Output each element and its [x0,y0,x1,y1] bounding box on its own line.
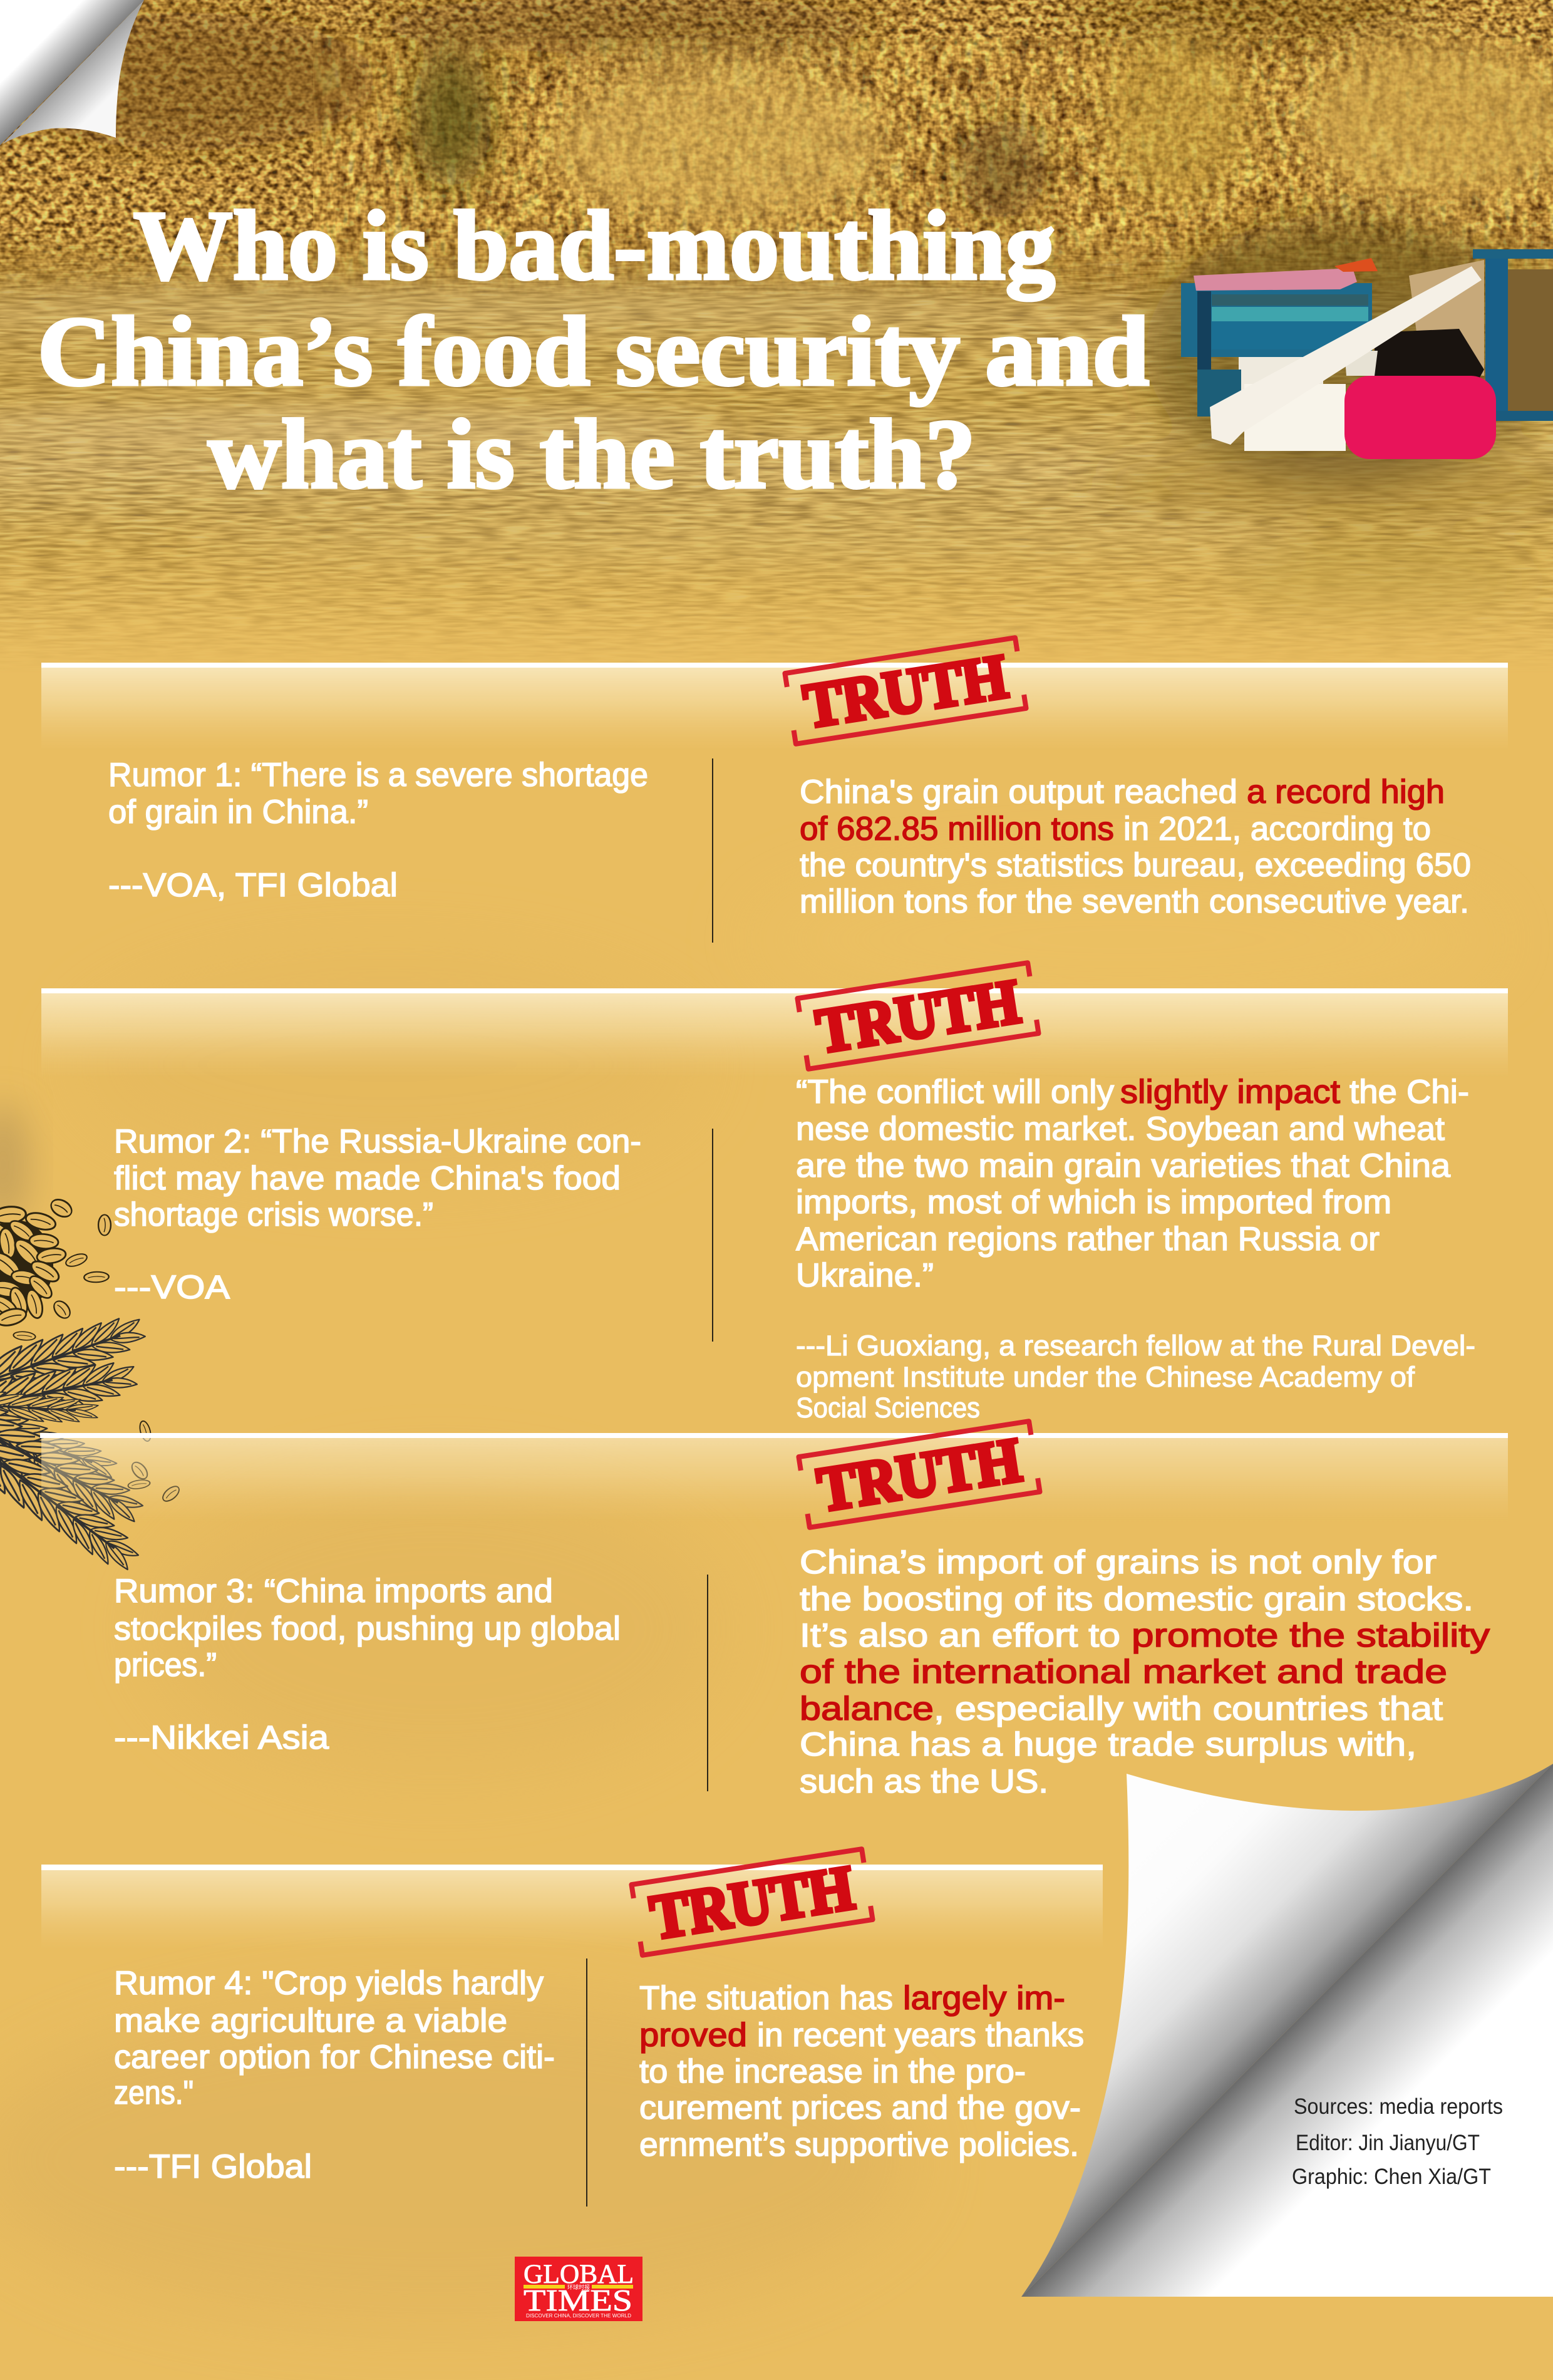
panel header band [41,988,1508,1079]
divider [712,758,713,943]
rumor text [114,1573,621,1756]
rumor text: stockpiles food, pushing up global [114,1610,621,1647]
truth text [800,1544,1490,1800]
rumor text: make agriculture a viable [114,2002,507,2039]
truth text: promote the stability [1132,1617,1490,1654]
photo: harvester [1181,249,1553,459]
rumor text: Rumor 1: “There is a severe shortage [108,757,648,794]
divider [586,1958,587,2207]
rumor text: shortage crisis worse.” [114,1196,433,1233]
stamp: truth: TRUTH [646,1853,859,1952]
truth text: China has a huge trade surplus with, [800,1726,1416,1763]
rumor text: Rumor 2: “The Russia-Ukraine con- [114,1123,641,1160]
panel: rumor 4 [41,1849,1103,2207]
truth text: the Chi- [1349,1074,1469,1110]
title: what is the truth? [208,400,976,509]
logo: Global Times: DISCOVER CHINA, DISCOVER THE WORLD [526,2313,631,2319]
truth text: a record high [1247,773,1445,810]
rumor text: ---TFI Global [114,2148,312,2185]
truth text: nese domestic market. Soybean and wheat [796,1110,1445,1147]
truth text: It’s also an effort to [800,1617,1120,1654]
title: China’s food security and [38,297,1149,406]
truth text: the boosting of its domestic grain stocks. [800,1581,1473,1618]
page curl: bottom right with credits [1021,1764,1553,2297]
logo: Global Times: GLOBAL [524,2260,634,2289]
truth text: “The conflict will only [796,1074,1115,1110]
divider [712,1129,713,1342]
truth text: largely im- [903,1980,1065,2017]
truth text: curement prices and the gov- [639,2089,1081,2126]
truth text: balance [800,1690,934,1727]
credits: Sources: media reports [1294,2094,1503,2119]
panel header band [40,1433,1508,1523]
truth text: million tons for the seventh consecutive year. [800,883,1469,920]
rumor text: ---VOA, TFI Global [108,867,398,904]
panel: rumor 1 [41,638,1508,943]
truth text: to the increase in the pro- [639,2053,1026,2090]
logo: Global Times [515,2257,642,2321]
stamp: truth: TRUTH [813,1425,1026,1524]
photo: wheat field background [0,0,1553,689]
rumor text [114,1965,555,2185]
truth text: China's grain output reached [800,773,1237,810]
credits: Editor: Jin Jianyu/GT [1296,2131,1480,2155]
truth text: such as the US. [800,1763,1048,1800]
truth text: of 682.85 million tons [800,810,1114,847]
truth text [796,1074,1475,1424]
truth text: Social Sciences [796,1392,980,1424]
rumor text: career option for Chinese citi- [114,2039,555,2076]
truth text [800,773,1471,920]
truth text: , especially with countries that [934,1690,1443,1727]
credits [1292,2094,1503,2189]
truth text: The situation has [639,1980,893,2017]
title [38,191,1149,509]
rumor text [108,757,648,904]
truth text: imports, most of which is imported from [796,1184,1391,1221]
rumor text: ---VOA [114,1269,230,1306]
page curl: top left [0,0,144,145]
truth text: proved [639,2017,747,2054]
logo: Global Times: TIMES [524,2283,632,2317]
rumor text: prices.” [114,1647,217,1684]
divider [707,1575,708,1791]
stamp: truth: TRUTH [812,966,1024,1066]
stamp: truth: TRUTH [800,641,1012,741]
truth text: ---Li Guoxiang, a research fellow at the Rural Devel- [796,1330,1475,1362]
rumor text [114,1123,641,1306]
truth text: slightly impact [1120,1074,1340,1110]
truth text: the country's statistics bureau, exceeding 650 [800,847,1471,884]
truth text: ernment’s supportive policies. [639,2126,1079,2163]
rumor text: zens." [114,2074,193,2111]
truth text: in 2021, according to [1123,810,1431,847]
credits: Graphic: Chen Xia/GT [1292,2165,1491,2189]
rumor text: flict may have made China's food [114,1160,621,1197]
truth text: China’s import of grains is not only for [800,1544,1437,1581]
panel header band [41,1865,1103,1949]
truth text: are the two main grain varieties that China [796,1147,1451,1184]
logo: Global Times: 环球时报 [567,2284,590,2290]
icon: wheat ears and grains illustration [0,1196,182,1580]
rumor text: Rumor 3: “China imports and [114,1573,553,1610]
truth text: American regions rather than Russia or [796,1221,1380,1258]
truth text: Ukraine.” [796,1257,934,1294]
truth text: in recent years thanks [757,2017,1084,2054]
truth text: opment Institute under the Chinese Academy of [796,1361,1415,1393]
panel header band [41,663,1508,752]
panel: rumor 2 [41,963,1508,1424]
title: Who is bad-mouthing [133,191,1055,301]
panel: rumor 3 [40,1421,1508,1800]
rumor text: Rumor 4: "Crop yields hardly [114,1965,544,2002]
truth text [639,1980,1084,2163]
truth text: of the international market and trade [800,1653,1447,1690]
rumor text: of grain in China.” [108,794,368,830]
rumor text: ---Nikkei Asia [114,1719,329,1756]
